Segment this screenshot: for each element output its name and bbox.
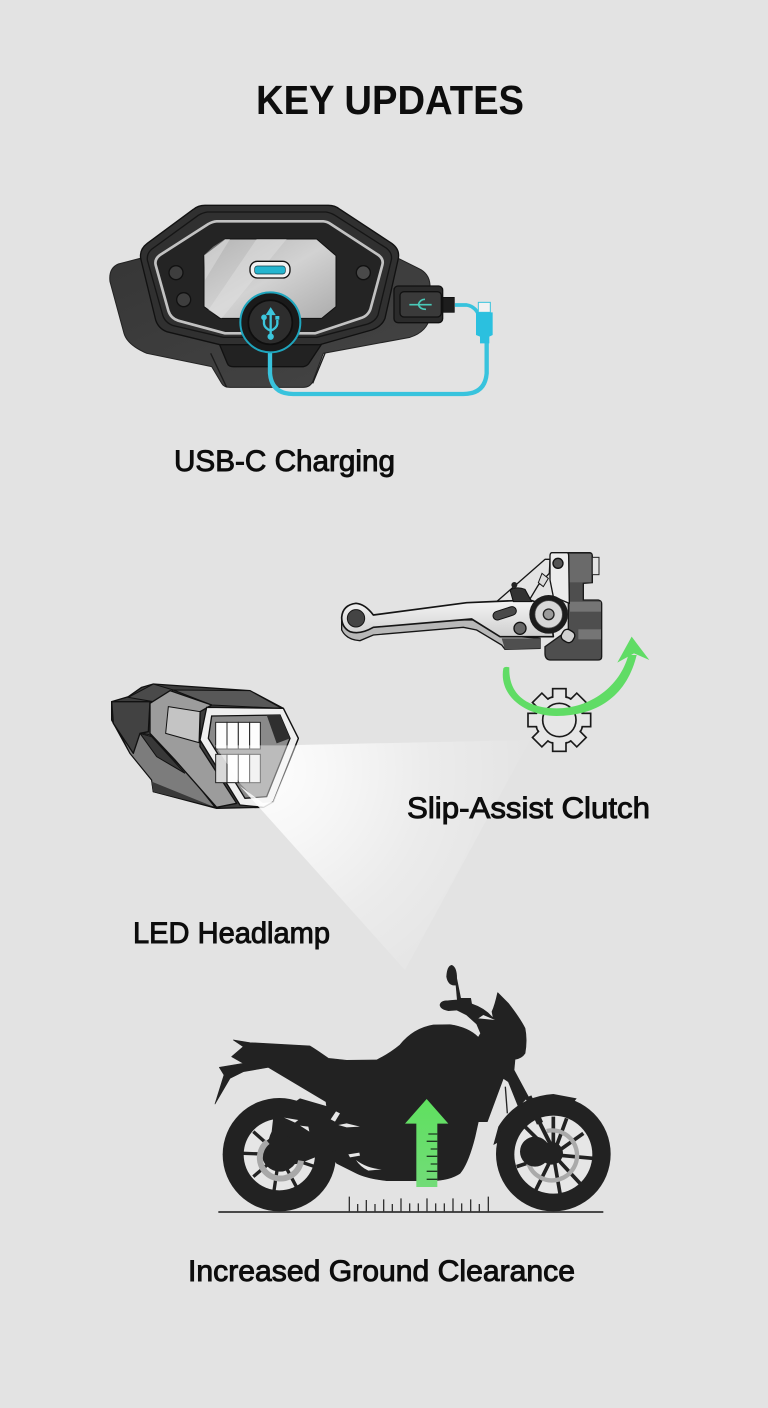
ground line <box>218 1209 603 1214</box>
green arrow <box>405 1099 448 1187</box>
USB symbol in badge <box>262 309 279 339</box>
thin brake line <box>505 1087 507 1113</box>
USB-C plug <box>476 302 493 343</box>
ruler ticks <box>349 1197 488 1212</box>
label: LED Headlamp: LED Headlamp <box>133 917 330 950</box>
cluster buttons <box>169 266 183 280</box>
bike body <box>215 965 528 1181</box>
lower side panel <box>117 727 215 807</box>
cable <box>270 340 487 394</box>
LED cells <box>216 722 260 783</box>
lamp front bezel <box>200 707 298 807</box>
light beam from headlamp <box>240 740 530 970</box>
strut behind lever <box>497 559 550 602</box>
adjuster knob <box>510 588 532 602</box>
rear block <box>112 702 150 753</box>
top panel <box>173 690 282 708</box>
display screen <box>204 239 336 318</box>
label: Increased Ground Clearance: Increased Ground Clearance <box>188 1255 575 1288</box>
pivot <box>529 595 568 634</box>
lever underside <box>342 620 540 649</box>
rear wheel <box>223 1098 336 1211</box>
USB side socket <box>394 286 454 323</box>
lever blade <box>342 600 553 637</box>
lamp silhouette <box>112 684 298 808</box>
cluster side housing <box>110 258 430 387</box>
lever mount body <box>545 553 602 660</box>
bike cut-outs <box>284 1015 495 1171</box>
beam wash over lens <box>215 745 297 807</box>
outer bezel <box>140 205 399 345</box>
icon: instrument cluster with USB-C charging <box>110 205 493 394</box>
side facet <box>166 707 200 743</box>
label: Slip-Assist Clutch: Slip-Assist Clutch <box>407 792 650 825</box>
lower chin panel <box>219 344 322 367</box>
icon: LED headlamp <box>112 684 298 808</box>
title: KEY UPDATES <box>256 77 524 123</box>
central shoulder <box>150 691 237 807</box>
green rotation arrow <box>503 637 649 716</box>
motorcycle silhouette with clearance arrow <box>215 965 611 1212</box>
lower bolt <box>560 628 576 644</box>
USB-C port on screen <box>250 261 290 278</box>
label: USB-C Charging: USB-C Charging <box>174 445 395 478</box>
USB hub circular badge <box>240 292 300 352</box>
upper bracket <box>550 553 569 603</box>
front wheel <box>493 1094 577 1145</box>
lamp interior <box>208 715 290 798</box>
silver trim ring <box>155 221 383 333</box>
icon: clutch lever <box>342 553 649 751</box>
gear icon <box>528 689 591 751</box>
